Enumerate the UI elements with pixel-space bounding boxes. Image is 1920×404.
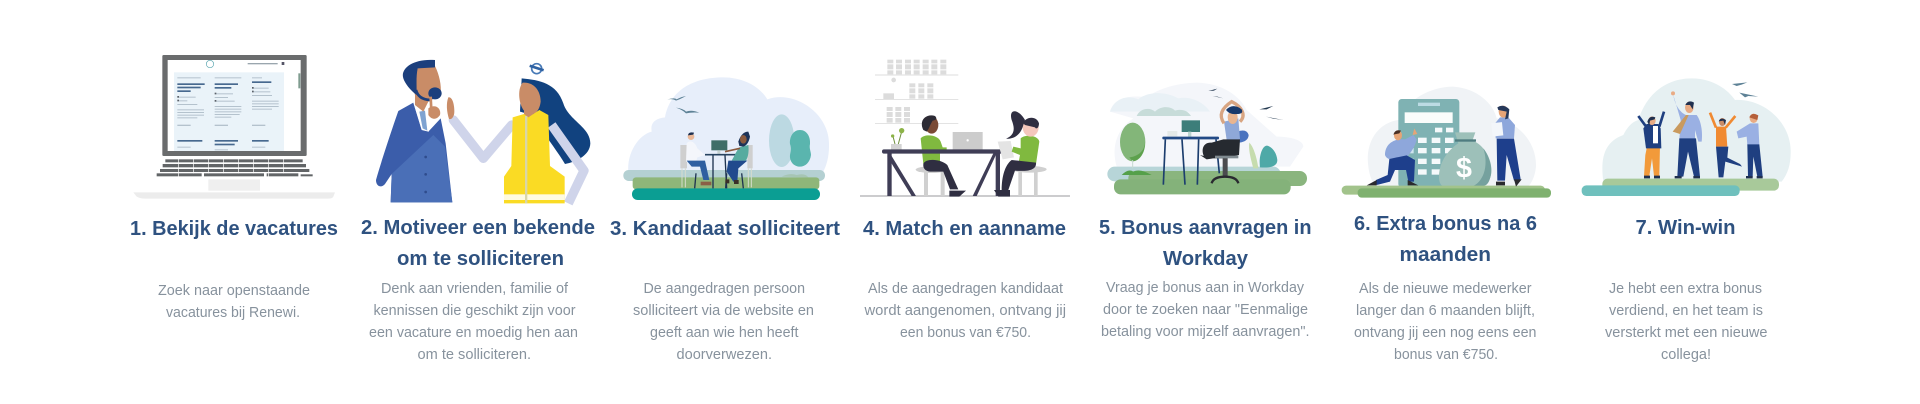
heading: step 2: 2. Motiveer een bekende [361, 216, 595, 239]
panel: step 1 [130, 55, 338, 321]
panel: step 7 [1582, 78, 1791, 363]
text block: step 3: solliciteert via de website en [633, 302, 814, 319]
heading: step 3: 3. Kandidaat solliciteert [610, 217, 840, 240]
text block: step 7: verdiend, en het team is [1609, 302, 1763, 319]
icon: laptop with vacancies page [133, 55, 335, 199]
text block: step 1: vacatures bij Renewi. [166, 304, 300, 321]
text block: step 3: doorverwezen. [676, 346, 772, 363]
text block: step 6: Als de nieuwe medewerker [1359, 280, 1532, 297]
heading: step 6: 6. Extra bonus na 6 [1354, 212, 1537, 235]
text block: step 6: ontvang jij een nog eens een [1354, 324, 1536, 341]
heading: step 1: 1. Bekijk de vacatures [130, 217, 338, 240]
text block: step 5 [1101, 279, 1310, 340]
heading: step 4: 4. Match en aanname [863, 217, 1066, 240]
heading: step 6 [1354, 212, 1537, 266]
text block: step 2: om te solliciteren. [418, 346, 531, 363]
heading: step 5: 5. Bonus aanvragen in [1099, 216, 1312, 239]
text block: step 7: collega! [1661, 346, 1711, 363]
heading: step 6: maanden [1400, 243, 1491, 266]
text block: step 3: De aangedragen persoon [644, 280, 805, 297]
text block: step 1: Zoek naar openstaande [158, 282, 310, 299]
text block: step 4: een bonus van €750. [900, 324, 1031, 341]
heading: step 2: om te solliciteren [397, 247, 564, 270]
icon: man and woman in safety vest [376, 60, 590, 203]
text block: step 6: bonus van €750. [1394, 346, 1498, 363]
panel: step 4 [860, 60, 1070, 341]
icon: interview outdoors [623, 77, 829, 200]
icon: calculator and money bag [1342, 87, 1551, 198]
text block: step 4: wordt aangenomen, ontvang jij [864, 302, 1066, 319]
text block: step 2: een vacature en moedig hen aan [369, 324, 578, 341]
icon: celebrating team [1582, 78, 1791, 196]
heading: step 5 [1099, 216, 1312, 270]
heading: step 7: 7. Win-win [1636, 216, 1736, 239]
text block: step 2: Denk aan vrienden, familie of [381, 280, 569, 297]
text block: step 4 [864, 280, 1066, 341]
text block: step 7: Je hebt een extra bonus [1609, 280, 1762, 297]
text block: step 1 [158, 282, 310, 321]
text block: step 6 [1354, 280, 1536, 363]
icon: two people at a table [860, 60, 1070, 197]
text block: step 3 [633, 280, 814, 363]
text block: step 3: geeft aan wie hen heeft [650, 324, 799, 341]
text block: step 5: Vraag je bonus aan in Workday [1106, 279, 1304, 296]
icon: person relaxing at desk [1107, 83, 1307, 194]
panel: step 2 [361, 60, 595, 363]
icon: calculator and money bag: $ [1456, 152, 1472, 184]
text block: step 5: door te zoeken naar "Eenmalige [1103, 301, 1308, 318]
panel: step 3 [610, 77, 840, 363]
text block: step 2 [369, 280, 578, 363]
text block: step 7: versterkt met een nieuwe [1605, 324, 1768, 341]
panel: step 6 [1342, 87, 1551, 363]
text block: step 5: betaling voor mijzelf aanvragen". [1101, 323, 1310, 340]
text block: step 6: langer dan 6 maanden blijft, [1356, 302, 1535, 319]
text block: step 7 [1605, 280, 1768, 363]
panel: step 5 [1099, 83, 1312, 340]
heading: step 5: Workday [1163, 247, 1249, 270]
heading: step 2 [361, 216, 595, 270]
text block: step 4: Als de aangedragen kandidaat [868, 280, 1064, 297]
text block: step 2: kennissen die geschikt zijn voor [374, 302, 576, 319]
